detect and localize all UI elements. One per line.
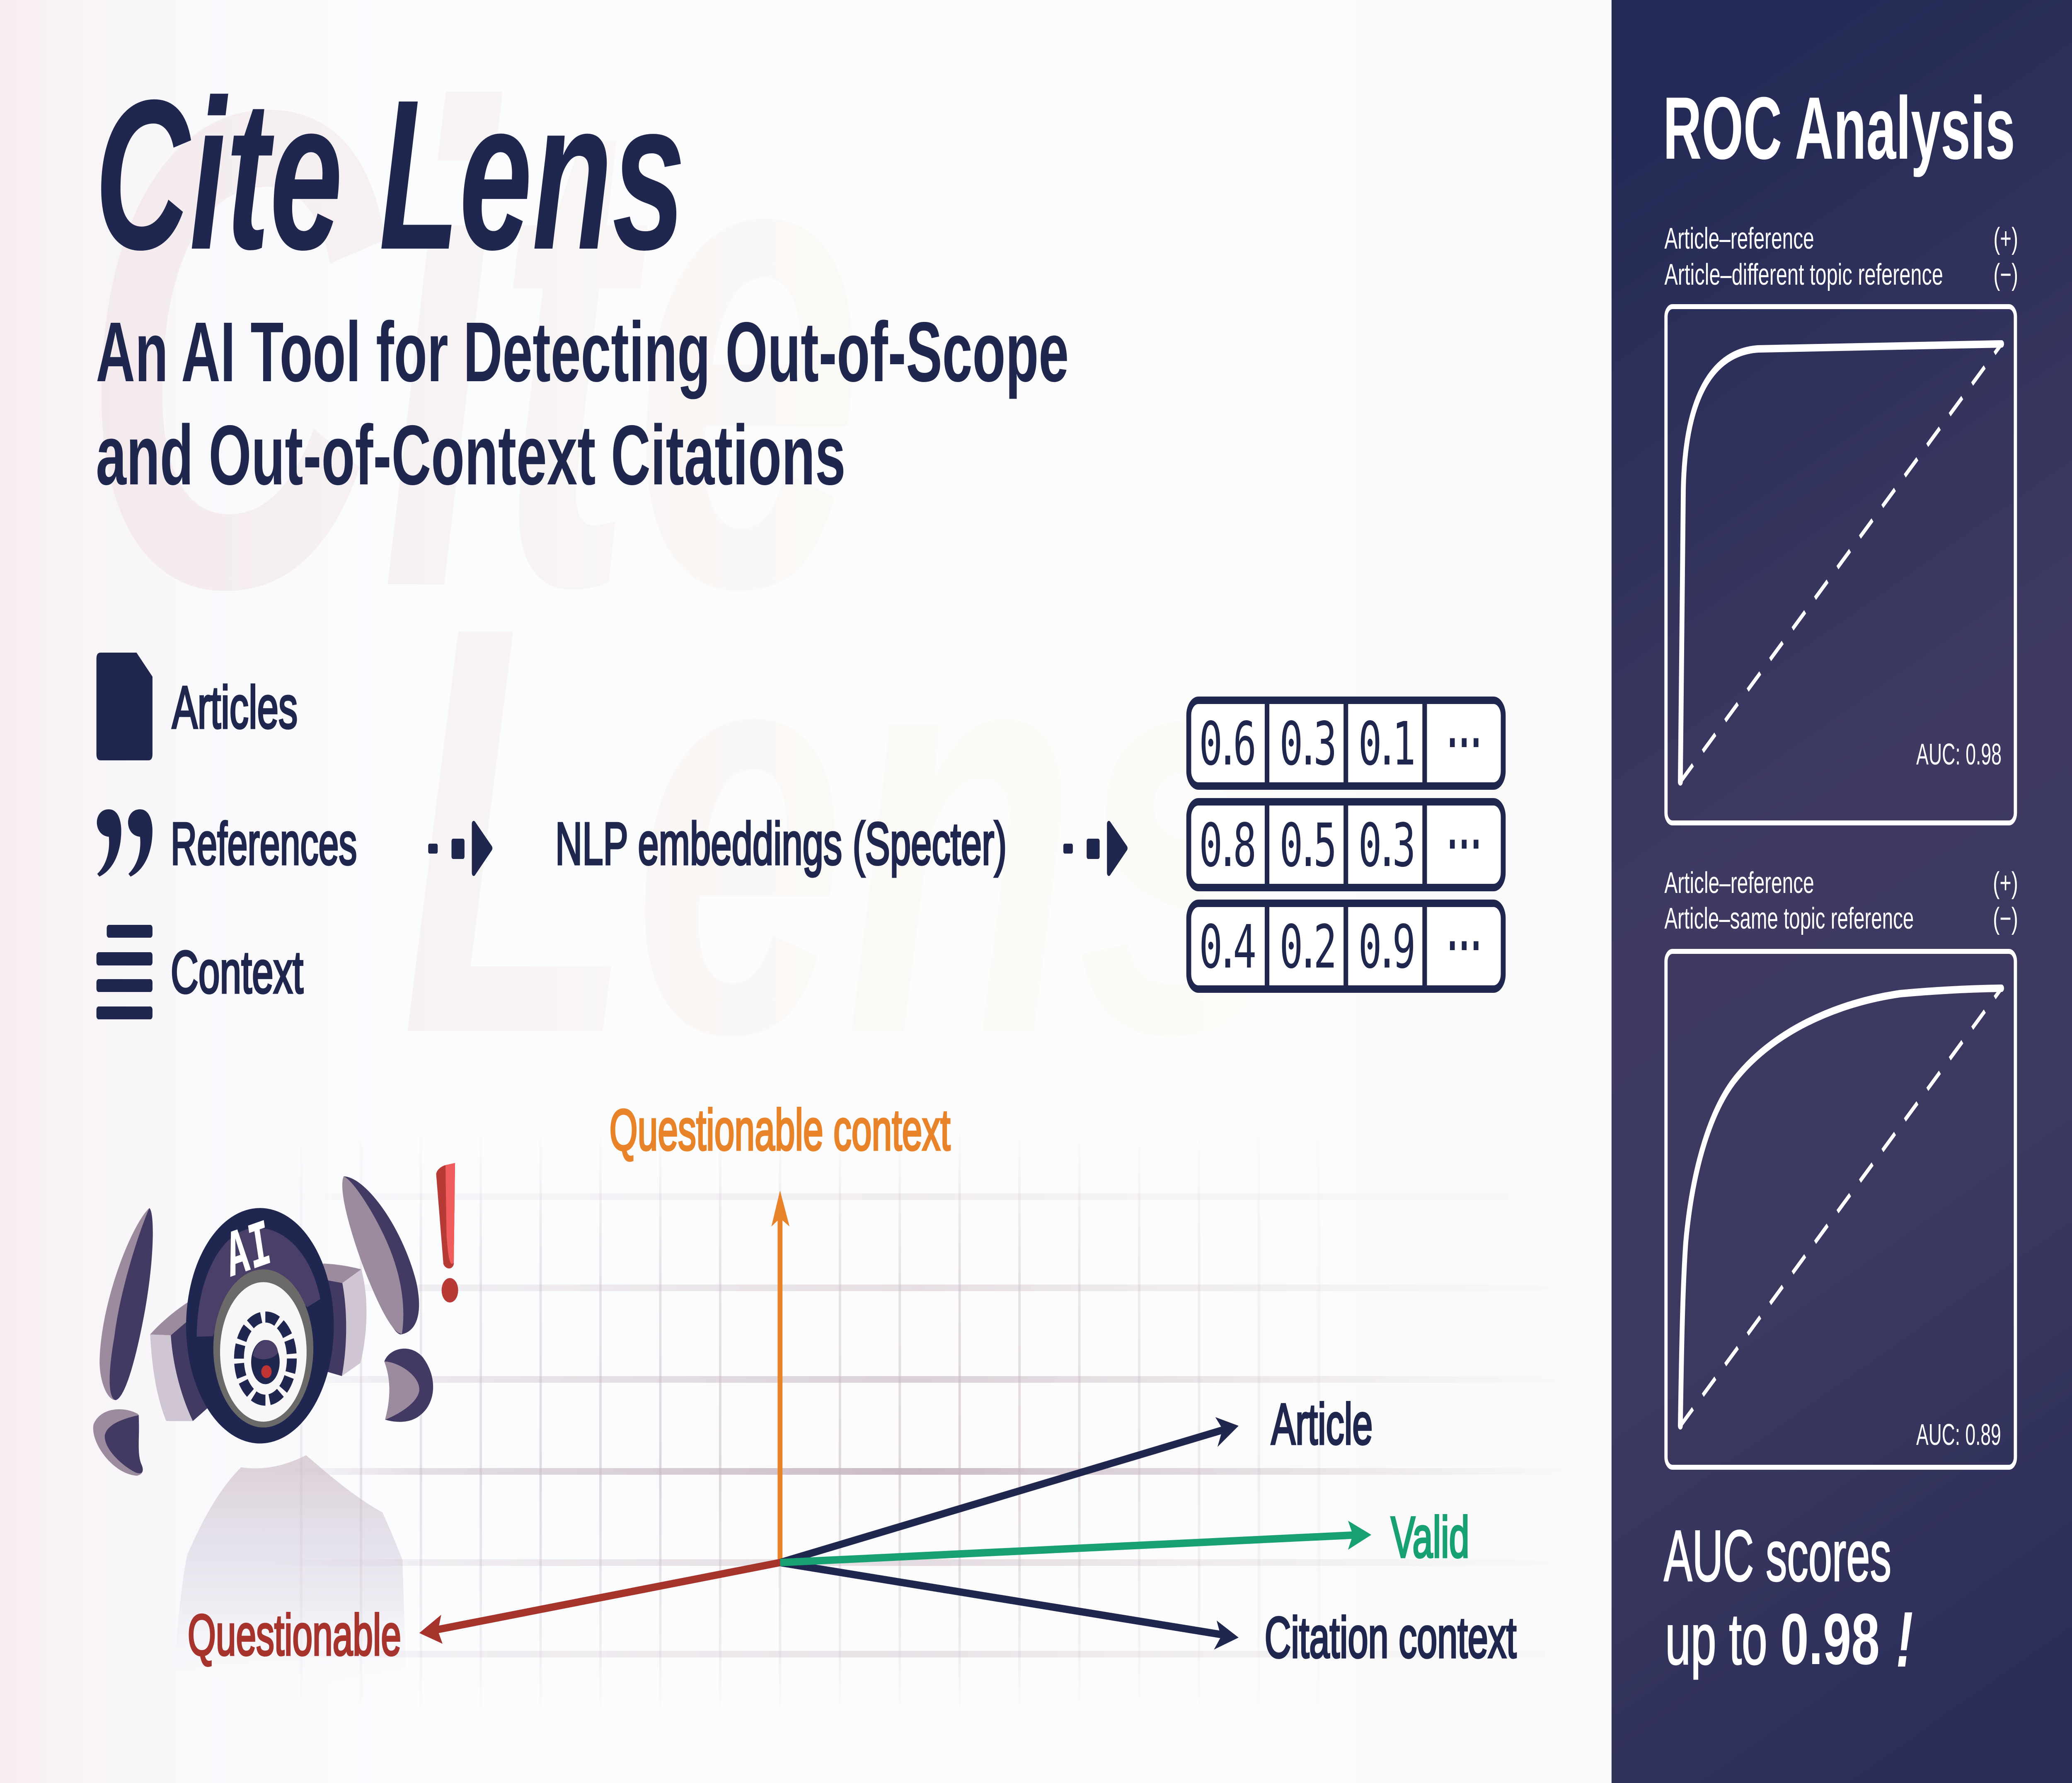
callout: AUC scores: up to (1665, 1599, 1767, 1680)
pupil highlight (253, 1340, 278, 1359)
callout: AUC scores: ! (1896, 1596, 1913, 1684)
legend: chart 2: (+) (1993, 866, 2018, 899)
grid background (271, 1127, 1571, 1715)
icon: context lines (97, 925, 152, 1019)
arrow: valid (780, 1521, 1371, 1563)
callout: AUC scores: AUC scores (1664, 1516, 1891, 1597)
exclamation mark (436, 1163, 458, 1302)
title: Cite Lens (95, 56, 685, 294)
watermark: Cite Lens (81, 0, 1289, 1154)
legend: chart 1: Article–reference (1664, 222, 1814, 255)
chart: ROC curve AUC 0.98 (1666, 307, 2015, 823)
vector row 3 (1189, 895, 1503, 989)
label: questionable context: Questionable context (610, 1098, 950, 1163)
legend: chart 1: (+) (1993, 222, 2018, 255)
subtitle: and Out-of-Context Citations (96, 407, 846, 503)
icon: article document (97, 653, 152, 760)
panel: ROC analysis (1612, 0, 2072, 1783)
arrow: inputs to embeddings (428, 824, 491, 873)
arrow: citation context (780, 1563, 1239, 1650)
page background (0, 0, 1612, 1783)
illustration: AI robot with alert (93, 1163, 458, 1476)
label: Articles: Articles (172, 674, 298, 741)
label: NLP embeddings: NLP embeddings (Specter) (555, 810, 1007, 877)
callout: AUC scores: 0.98 (1780, 1599, 1880, 1680)
vector chart (188, 1098, 1516, 1670)
arrow: questionable (419, 1563, 780, 1644)
panel heading: ROC Analysis (1663, 79, 2015, 178)
legend: chart 1: Article–different topic reference (1664, 258, 1943, 291)
lens face (220, 1282, 307, 1422)
right lower fragment (384, 1349, 433, 1422)
callout: AUC scores (1664, 1516, 1913, 1684)
vector row 2: ... (1440, 793, 1479, 863)
legend: chart 2 (1664, 866, 2018, 935)
vector row 2: 0.3 (1358, 810, 1413, 880)
arrow: article (780, 1417, 1239, 1563)
AUC label: 0.89: AUC: 0.89 (1916, 1418, 2001, 1451)
label: article: Article (1271, 1392, 1372, 1457)
lens ticks (239, 1317, 292, 1400)
inputs list (97, 653, 357, 1019)
label: citation context: Citation context (1265, 1606, 1516, 1670)
label: questionable: Questionable (188, 1603, 401, 1668)
panel background (1612, 0, 2072, 1783)
icon label: AI: AI (221, 1207, 275, 1291)
label: References: References (171, 810, 357, 877)
vector row 1 (1189, 692, 1503, 786)
vector row 1: 0.6 (1199, 709, 1254, 779)
chart: ROC curve AUC 0.89 (1666, 951, 2015, 1467)
vector row 2: 0.8 (1199, 810, 1254, 880)
vector row 2 (1189, 793, 1503, 888)
vector row 3: 0.4 (1199, 912, 1255, 982)
left block (150, 1302, 208, 1421)
robot head (186, 1208, 334, 1444)
right block (323, 1263, 366, 1376)
label: Context: Context (171, 939, 303, 1006)
vector row 3: 0.2 (1280, 912, 1334, 982)
subtitle: An AI Tool for Detecting Out-of-Scope (96, 304, 1069, 399)
left wing (99, 1208, 153, 1400)
AUC label: 0.98: AUC: 0.98 (1916, 738, 2002, 771)
legend: chart 2: Article–same topic reference (1664, 902, 1914, 935)
arrow: embeddings to vectors (1063, 824, 1126, 873)
vector row 1: 0.1 (1358, 709, 1413, 779)
axis arrow: questionable context (771, 1190, 789, 1563)
icon: quotation marks (97, 809, 152, 877)
lens rim (213, 1269, 313, 1427)
subtitle (96, 304, 1069, 503)
robot shadow (174, 1455, 406, 1682)
watermark: Cite Lens: Lens (401, 506, 1289, 1154)
embedding vectors (1189, 692, 1503, 989)
legend: chart 1: (−) (1993, 258, 2018, 291)
legend: chart 1 (1664, 222, 2018, 291)
right wing (342, 1176, 419, 1335)
legend: chart 2: Article–reference (1664, 866, 1814, 899)
vector row 3: ... (1440, 895, 1479, 964)
label: valid: Valid (1391, 1505, 1469, 1570)
left lower fragment (93, 1409, 143, 1476)
vector row 2: 0.5 (1280, 810, 1334, 880)
legend: chart 2: (−) (1993, 902, 2018, 935)
vector row 1: 0.3 (1280, 709, 1334, 779)
pupil red dot (261, 1365, 271, 1378)
vector row 1: ... (1440, 692, 1479, 761)
vector row 3: 0.9 (1358, 912, 1413, 982)
pupil (251, 1340, 280, 1384)
head highlight (197, 1228, 320, 1337)
